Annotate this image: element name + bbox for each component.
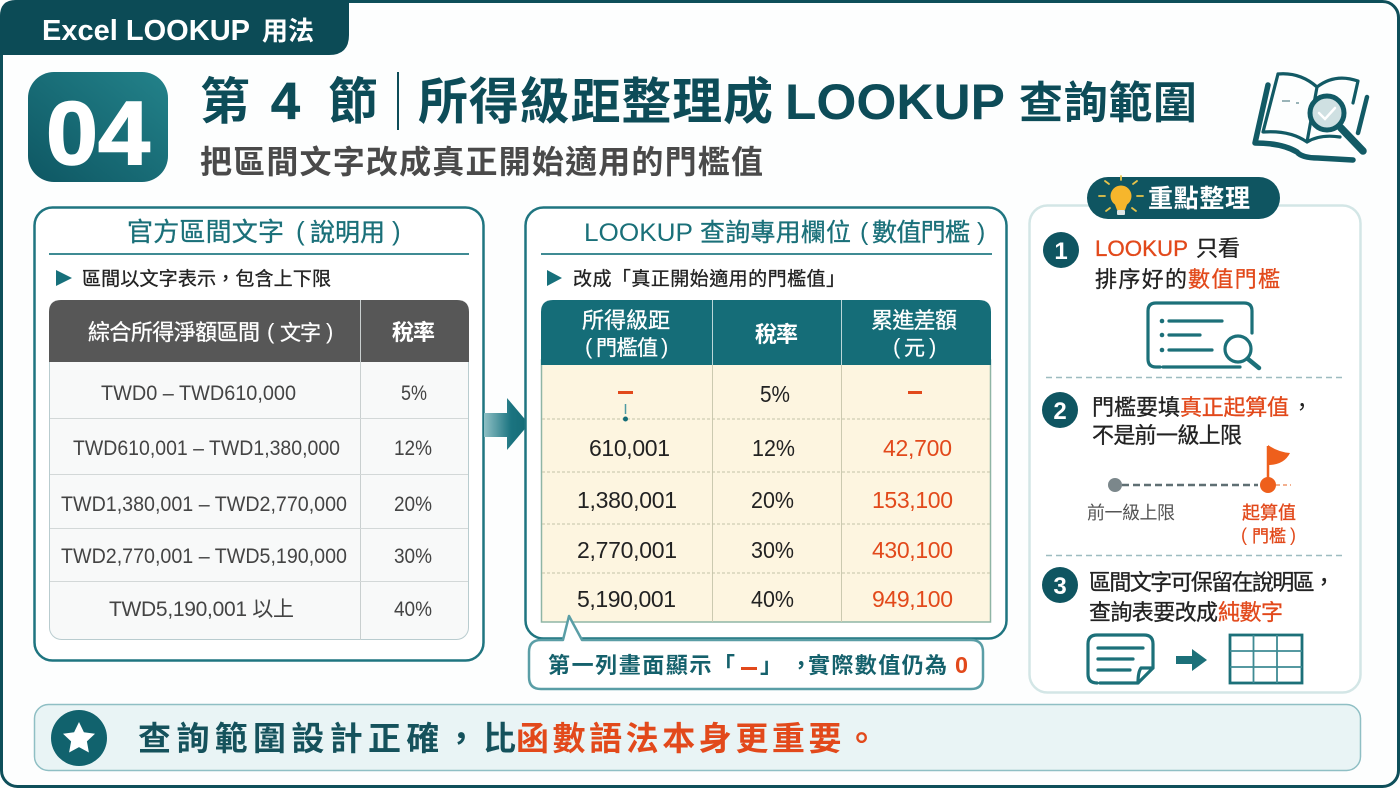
title xyxy=(200,72,1197,131)
table: thresholds: 5,190,001 xyxy=(577,586,676,612)
panel heading: LOOKUP xyxy=(584,219,693,247)
panel heading: ( xyxy=(296,216,305,246)
table: bracket text and rates: TWD5,190,001 以上 xyxy=(109,598,294,621)
panel heading: ) xyxy=(392,216,401,246)
title: LOOKUP xyxy=(785,74,1005,130)
panel heading: ( xyxy=(860,218,869,246)
panel heading: 說明用 xyxy=(310,219,385,247)
table: bracket text and rates: ( xyxy=(267,319,275,344)
table: bracket text and rates: 30% xyxy=(394,545,432,568)
table: thresholds: ) xyxy=(929,334,936,359)
title: 所得級距整理成 xyxy=(418,74,773,130)
icon: open book with magnifier xyxy=(1255,74,1367,160)
panel: official bracket text xyxy=(34,208,484,660)
category tab: 用法 xyxy=(262,16,314,46)
panel heading: 官方區間文字 xyxy=(127,217,284,247)
table: thresholds: 所得級距 xyxy=(582,308,670,333)
diagram: threshold timeline: 起算值 xyxy=(1242,503,1296,523)
point 2: 真正起算值 xyxy=(1180,395,1289,420)
table: bracket text and rates: 12% xyxy=(394,437,432,460)
table: thresholds: 153,100 xyxy=(872,487,953,513)
point 2: 不是前一級上限 xyxy=(1092,423,1242,448)
table: thresholds: 40% xyxy=(751,586,794,612)
category tab: Excel LOOKUP xyxy=(42,15,250,47)
callout: first row note xyxy=(529,616,983,689)
point 1 xyxy=(1043,232,1280,368)
table: bracket text and rates: TWD1,380,001 – TWD2,770,000 xyxy=(61,493,347,516)
point 2 xyxy=(1042,392,1313,546)
point 3 xyxy=(1042,567,1335,683)
subtitle: 把區間文字改成真正開始適用的門檻值 xyxy=(200,144,763,180)
table: bracket text and rates: TWD610,001 – TWD1,380,000 xyxy=(73,437,340,460)
panel heading: ) xyxy=(977,218,985,246)
table: thresholds: 30% xyxy=(751,537,794,563)
panel heading xyxy=(584,218,985,247)
table: thresholds: 1,380,001 xyxy=(577,487,677,513)
point 3: 3 xyxy=(1053,573,1067,600)
diagram: threshold timeline: 門檻 xyxy=(1252,527,1286,546)
table: thresholds: 12% xyxy=(752,435,795,461)
point 1: 只看 xyxy=(1196,236,1240,261)
diagram: threshold timeline: ) xyxy=(1290,525,1296,545)
point 2: 門檻要填 xyxy=(1092,395,1180,420)
heading pill: key points xyxy=(1087,176,1280,219)
heading pill: key points: 重點整理 xyxy=(1148,185,1250,213)
table: thresholds: 949,100 xyxy=(872,586,953,612)
point 3: 查詢表要改成 xyxy=(1089,600,1218,625)
callout: first row note: 第一列畫面顯示「 xyxy=(548,653,735,678)
table: thresholds: 累進差額 xyxy=(871,308,957,333)
category tab xyxy=(0,0,349,55)
table: thresholds: 元 xyxy=(904,337,925,360)
table: bracket text and rates: 5% xyxy=(401,382,427,405)
table: bracket text and rates: 40% xyxy=(394,598,432,621)
panel heading xyxy=(127,216,401,247)
title: 節 xyxy=(328,74,378,130)
table: bracket text and rates xyxy=(49,300,469,640)
note: change to start thresholds: 改成「真正開始適用的門檻值」 xyxy=(573,268,845,290)
diagram: threshold timeline xyxy=(1087,445,1296,546)
point 3: 區間文字可保留在說明區， xyxy=(1089,570,1335,595)
section number badge: 04 xyxy=(46,84,150,184)
point 1: 1 xyxy=(1054,238,1068,265)
callout: first row note: ， xyxy=(790,653,812,678)
table: thresholds: ) xyxy=(661,334,668,359)
table: bracket text and rates: 文字 xyxy=(280,322,321,345)
icon: list with magnifier xyxy=(1148,303,1259,368)
table: bracket text and rates: 綜合所得淨額區間 xyxy=(88,320,260,345)
callout: first row note: 0 xyxy=(955,652,968,678)
table: bracket text and rates: 20% xyxy=(394,493,432,516)
table: thresholds: ( xyxy=(585,334,593,359)
point 1: LOOKUP xyxy=(1095,236,1188,261)
table: bracket text and rates: TWD0 – TWD610,000 xyxy=(101,382,296,405)
point 1: 排序好的 xyxy=(1095,267,1187,292)
takeaway banner: 函數語法本身更重要。 xyxy=(516,720,878,757)
callout: first row note: 」 xyxy=(760,653,782,678)
point 2: 2 xyxy=(1053,398,1067,425)
table: bracket text and rates: ) xyxy=(326,319,333,344)
table: thresholds: 門檻值 xyxy=(596,337,658,360)
table: thresholds xyxy=(541,300,991,622)
takeaway banner xyxy=(34,704,1360,770)
takeaway banner: 查詢範圍設計正確，比 xyxy=(138,720,516,757)
table: bracket text and rates: TWD2,770,001 – TWD5,190,000 xyxy=(61,545,347,568)
table: thresholds: 430,100 xyxy=(872,537,953,563)
icon: note to table xyxy=(1088,635,1302,683)
callout: first row note: 實際數值仍為 xyxy=(808,653,947,678)
table: thresholds: 20% xyxy=(751,487,794,513)
table: thresholds: 42,700 xyxy=(883,435,952,461)
section number badge xyxy=(28,72,168,184)
arrow: left panel to lookup panel xyxy=(484,398,529,450)
icon: star badge xyxy=(51,710,107,766)
diagram: threshold timeline: ( xyxy=(1241,525,1247,545)
title: 4 xyxy=(271,73,300,131)
table: bracket text and rates: 稅率 xyxy=(392,320,435,345)
panel: key points xyxy=(1030,176,1360,692)
note: bracket text explanation: 區間以文字表示，包含上下限 xyxy=(82,268,331,290)
table: thresholds: ( xyxy=(893,334,901,359)
title: 查詢範圍 xyxy=(1019,79,1197,128)
point 2: ， xyxy=(1291,395,1313,420)
diagram: threshold timeline: 前一級上限 xyxy=(1087,503,1175,523)
panel heading: 查詢專用欄位 xyxy=(700,219,851,247)
point 3: 純數字 xyxy=(1218,600,1283,625)
table: thresholds: 610,001 xyxy=(589,435,670,461)
title: 第 xyxy=(200,74,250,130)
table: thresholds: 稅率 xyxy=(755,322,798,347)
panel heading: 數值門檻 xyxy=(872,219,970,247)
table: thresholds: 5% xyxy=(760,381,790,407)
point 1: 數值門檻 xyxy=(1188,267,1280,292)
panel: lookup fields xyxy=(526,208,1006,638)
icon: light bulb xyxy=(1099,176,1143,215)
table: thresholds: 2,770,001 xyxy=(577,537,677,563)
